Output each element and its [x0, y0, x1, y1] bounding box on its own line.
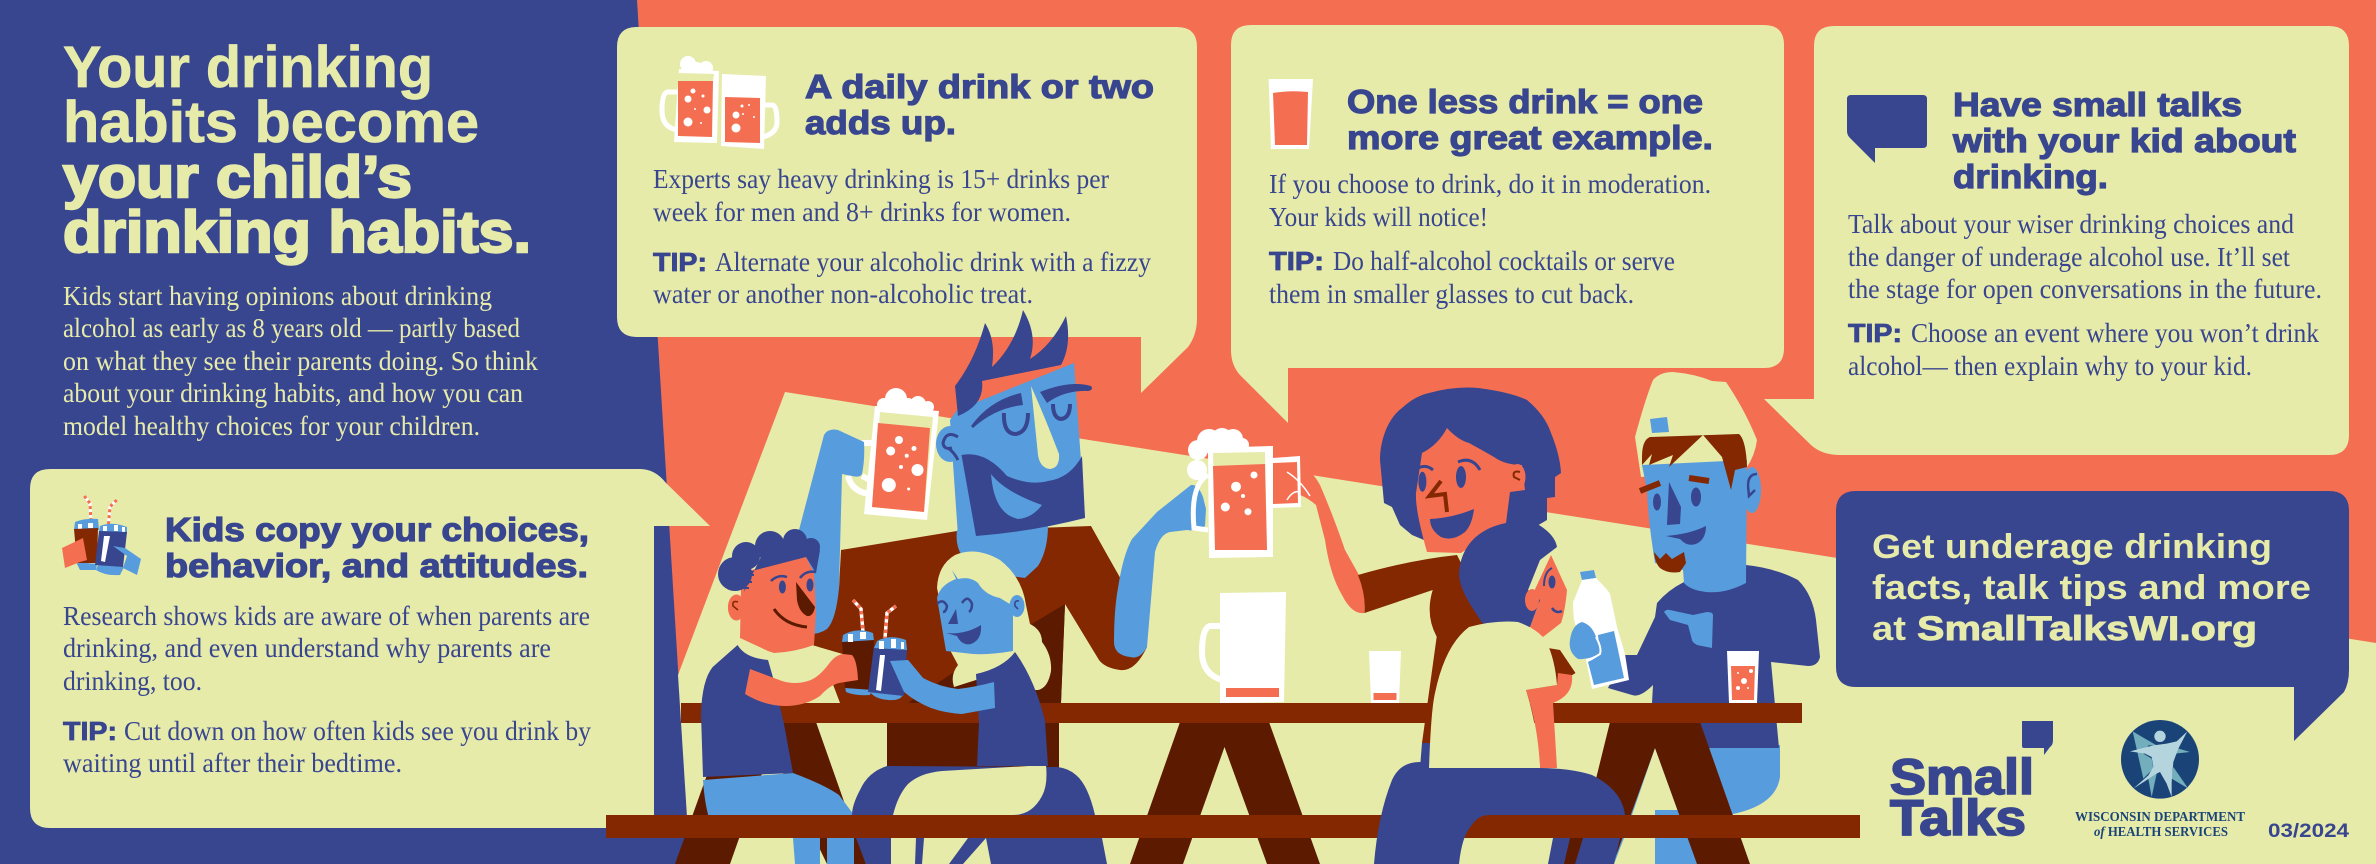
intro paragraph — [63, 281, 538, 441]
intro paragraph: alcohol as early as 8 years old — partly based — [63, 313, 520, 343]
speech bubble: kids panel — [30, 469, 710, 828]
title: your child’s — [63, 145, 412, 210]
logo: Wisconsin Department of Health Services: WISCONSIN DEPARTMENT — [2075, 810, 2246, 825]
icon: two beer mugs — [662, 56, 777, 149]
call to action panel — [1836, 491, 2349, 741]
figure: boy — [701, 529, 854, 864]
heading: small talks: with your kid about — [1952, 122, 2296, 159]
figure: man with bottle — [1605, 372, 1820, 864]
heading: kids copy — [165, 511, 589, 584]
body text: daily drink: week for men and 8+ drinks for women. — [653, 197, 1071, 227]
heading: small talks: Have small talks — [1953, 86, 2242, 123]
body text: small talks: Talk about your wiser drinking choices and — [1848, 209, 2294, 239]
heading: one less drink: more great example. — [1347, 119, 1713, 156]
illustration: family at picnic table — [606, 310, 1860, 864]
heading: daily drink: adds up. — [805, 104, 956, 141]
intro panel: headline and paragraph — [63, 35, 538, 441]
heading: small talks: drinking. — [1953, 158, 2108, 195]
intro paragraph: on what they see their parents doing. So think — [63, 346, 538, 376]
heading: daily drink: A daily drink or two — [805, 68, 1154, 105]
call to action text — [1872, 528, 2311, 648]
bench — [606, 815, 1860, 838]
call to action text: facts, talk tips and more — [1872, 569, 2311, 607]
table top — [681, 703, 1802, 723]
logo: Small Talks: Talks — [1890, 790, 2026, 846]
speech bubble: small talks panel — [1764, 26, 2349, 455]
beer pitcher: empty — [1202, 592, 1286, 703]
body text: one less drink — [1269, 169, 1711, 309]
body text: one less drink: If you choose to drink, do it in moderation. — [1269, 169, 1711, 199]
body text: one less drink: Your kids will notice! — [1269, 202, 1488, 232]
heading: kids copy: behavior, and attitudes. — [165, 547, 588, 584]
body text: kids copy: TIP: — [63, 716, 117, 746]
heading: small talks — [1952, 86, 2296, 195]
icon: speech bubble — [1847, 95, 1927, 163]
figure: girl — [852, 551, 1107, 864]
body text: kids copy: Research shows kids are aware of when parents are — [63, 601, 590, 631]
beer mug: mom — [1187, 428, 1310, 558]
title: Your drinking — [63, 35, 433, 100]
beer mug: dad — [864, 388, 939, 520]
body text: small talks: Choose an event where you won’t drink — [1911, 318, 2319, 348]
logo: Wisconsin Department of Health Services — [2075, 720, 2246, 840]
logo: Wisconsin Department of Health Services: of HEALTH SERVICES — [2094, 825, 2228, 840]
logo: Small Talks: Small — [1890, 749, 2034, 805]
boy's arm — [745, 654, 858, 706]
intro paragraph: model healthy choices for your children. — [63, 411, 480, 441]
title: habits become — [63, 90, 479, 155]
heading: daily drink — [805, 68, 1154, 141]
drinking glass: man — [1727, 651, 1759, 703]
body text: one less drink: TIP: — [1269, 246, 1324, 276]
icon: glass — [1269, 79, 1313, 149]
intro paragraph: about your drinking habits, and how you can — [63, 378, 523, 408]
figure: seated child seen from behind — [1374, 522, 1625, 864]
panel: one less drink — [1231, 25, 1784, 423]
figure: mom — [1300, 388, 1576, 760]
intro paragraph: Kids start having opinions about drinking — [63, 281, 492, 311]
body text: one less drink: them in smaller glasses to cut back. — [1269, 279, 1634, 309]
cans clinking: boy and girl — [842, 600, 923, 700]
body text: daily drink — [653, 164, 1151, 309]
body text: small talks: alcohol— then explain why to your kid. — [1848, 351, 2252, 381]
body text: daily drink: Experts say heavy drinking is 15+ drinks per — [653, 164, 1109, 194]
body text: kids copy: Cut down on how often kids see you drink by — [124, 716, 591, 746]
call to action text: Get underage drinking — [1872, 528, 2272, 566]
body text: daily drink: TIP: — [653, 247, 707, 277]
title — [63, 35, 531, 265]
title: drinking habits. — [63, 200, 531, 265]
body text: kids copy: drinking, and even understand why parents are — [63, 633, 551, 663]
water bottle and hand — [1570, 570, 1629, 689]
panel: a daily drink — [617, 27, 1197, 393]
figure: dad — [790, 310, 1206, 768]
body text: small talks — [1848, 209, 2322, 381]
date: 03/2024 — [2268, 820, 2349, 842]
heading: one less drink — [1347, 83, 1713, 156]
body text: one less drink: Do half-alcohol cocktails or serve — [1333, 246, 1675, 276]
small glass: nearly empty — [1369, 651, 1401, 703]
call to action text: SmallTalksWI.org — [1917, 610, 2257, 648]
panel: kids copy your choices — [30, 469, 710, 828]
call to action text: at — [1872, 610, 1906, 648]
body text: small talks: the danger of underage alcohol use. It’ll set — [1848, 242, 2290, 272]
logo: Small Talks — [1890, 721, 2053, 846]
heading: kids copy: Kids copy your choices, — [165, 511, 589, 548]
panel: have small talks — [1764, 26, 2349, 455]
body text: kids copy — [63, 601, 591, 778]
heading: one less drink: One less drink = one — [1347, 83, 1703, 120]
icon: two cans clinking — [62, 496, 141, 575]
body text: daily drink: water or another non-alcoholic treat. — [653, 279, 1033, 309]
speech bubble: one less drink panel — [1231, 25, 1784, 423]
body text: kids copy: waiting until after their bedtime. — [63, 748, 402, 778]
body text: kids copy: drinking, too. — [63, 666, 202, 696]
body text: small talks: TIP: — [1848, 318, 1902, 348]
body text: small talks: the stage for open conversations in the future. — [1848, 274, 2322, 304]
speech bubble: daily drink panel — [617, 27, 1197, 393]
table legs — [675, 722, 1750, 864]
speech bubble: call to action — [1836, 491, 2349, 741]
body text: daily drink: Alternate your alcoholic drink with a fizzy — [715, 247, 1151, 277]
